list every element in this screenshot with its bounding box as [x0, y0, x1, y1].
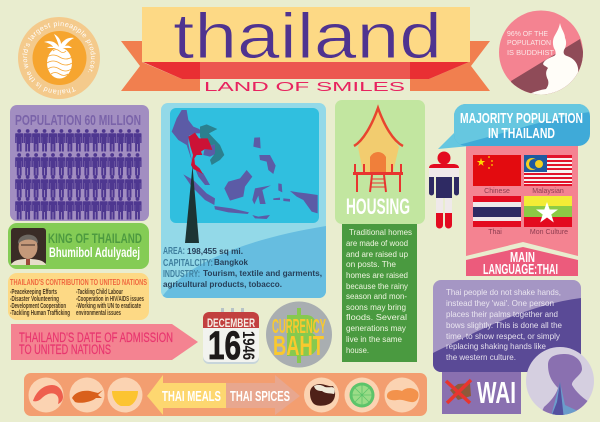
wai description: the western culture. [446, 352, 516, 362]
bubble text: IN THAILAND [488, 125, 555, 142]
housing description: season and mon- [346, 291, 407, 301]
badge: buddhist population [499, 10, 583, 94]
month: DECEMBER [207, 316, 255, 330]
map [170, 108, 319, 243]
badge: currency [266, 302, 332, 368]
subtitle: LAND OF SMILES [204, 80, 405, 94]
panel: population flags [466, 146, 578, 278]
buddhist text: 96% OF THE [507, 31, 548, 38]
housing description: floods. Several [346, 312, 407, 322]
contribution list: -Peacekeeping Efforts [10, 289, 57, 296]
thai spices label: THAI SPICES [230, 389, 290, 405]
flag: China [473, 155, 521, 186]
housing description: are made of wood [346, 238, 408, 248]
main language [466, 247, 578, 278]
contribution list [10, 289, 144, 317]
contribution heading: THAILAND'S CONTRIBUTION TO UNITED NATIONS [10, 277, 147, 287]
panel: population [10, 105, 149, 221]
label: Mon Culture: Mon Culture [530, 229, 568, 236]
speech bubble: majority population [438, 104, 590, 149]
icon: person in Thai flag colours [429, 152, 459, 229]
contribution list: -Tackling Child Labour [76, 289, 123, 296]
currency text: BAHT [273, 330, 324, 361]
housing description: soons may bring [346, 302, 406, 312]
facts: AREA: [163, 245, 185, 257]
facts: Tourism, textile and garments, [203, 269, 322, 278]
title banner [121, 0, 490, 94]
wai description: instead they 'wai'. One person [446, 298, 554, 308]
arrow: thai spices [226, 375, 300, 415]
admission text: TO UNITED NATIONS [19, 342, 111, 357]
people pictogram [15, 129, 142, 220]
icon: shrimp [28, 378, 64, 412]
facts: 198,455 sq mi. [187, 247, 243, 256]
panel: wai [433, 280, 581, 372]
panel: UN contribution [8, 273, 149, 320]
flag: Thai [473, 196, 521, 227]
panel: king [8, 223, 149, 269]
wai description: places their palms together and [446, 309, 558, 319]
wai text: WAI [477, 375, 516, 410]
panel: map and facts [161, 103, 326, 298]
year: 1946 [239, 331, 258, 360]
contribution list: -Disaster Volunteering [10, 296, 59, 303]
housing description: and are raised up [346, 249, 408, 259]
wai label box [442, 362, 521, 414]
icon: thai house [353, 108, 403, 192]
icon: no handshake [446, 380, 471, 403]
housing description: because the rainy [346, 281, 409, 291]
icon: pineapple [44, 34, 74, 78]
arrow: UN admission date [11, 324, 198, 360]
day: 16 [208, 324, 241, 368]
facts: CAPITALCITY: [163, 257, 213, 269]
buddhist text: IS BUDDHIST [507, 50, 555, 57]
housing description: Traditional homes [349, 227, 413, 237]
buddhist text [507, 31, 555, 57]
contribution list: -Cooperation in HIV/AIDS issues [76, 296, 144, 303]
king name: Bhumibol Adulyadej [49, 245, 140, 260]
panel: housing [335, 100, 425, 224]
curved slogan: Thailand is the world's largest pineapple producer. [22, 20, 96, 95]
housing description [342, 224, 417, 362]
admission text [19, 330, 173, 357]
arrow: thai meals [147, 375, 226, 415]
icon: coconut [304, 378, 339, 412]
facts: Bangkok [214, 258, 249, 267]
icon: wai gesture [526, 347, 596, 420]
icon: buddha [526, 23, 578, 96]
housing description: live in the same [346, 334, 402, 344]
contribution list: environmental issues [76, 310, 121, 317]
badge: currency: CURRENCY [272, 316, 326, 338]
label: Thai: Thai [488, 229, 502, 236]
main language: MAIN [510, 250, 535, 266]
facts: agricultural products, tobacco. [163, 280, 282, 289]
thai meals label: THAI MEALS [162, 389, 221, 405]
label: Chinese: Chinese [484, 188, 510, 195]
icon: bowl [108, 378, 142, 412]
badge: pineapple producer [18, 17, 100, 99]
buddhist text: POPULATION [507, 40, 551, 47]
icon: peanut [384, 378, 420, 412]
icon: fish [70, 378, 104, 412]
facts: INDUSTRY: [163, 268, 200, 280]
contribution list: -Working with UN to eradicate [76, 303, 141, 310]
flag: Mon culture [524, 196, 572, 227]
currency text [272, 316, 326, 361]
housing description: on posts. The [346, 259, 396, 269]
icon: calendar [203, 308, 259, 368]
wai description: time, to show respect, or simply [446, 331, 561, 341]
wai description: bows slightly. This is done all the [446, 320, 562, 330]
king portrait [11, 228, 46, 265]
housing description: house. [346, 345, 369, 355]
panel: meals and spices [24, 373, 427, 416]
housing description: homes are raised [346, 270, 408, 280]
housing heading: HOUSING [346, 194, 410, 219]
bubble text [460, 110, 583, 142]
contribution list: -Development Cooperation [10, 303, 66, 310]
wai description [446, 287, 562, 362]
wai description: Thai people do not shake hands, [446, 287, 561, 297]
map pointer [185, 166, 199, 243]
housing description: generations may [346, 323, 407, 333]
admission text: THAILAND'S DATE OF ADMISSION [19, 330, 173, 345]
label: Malaysian: Malaysian [532, 188, 564, 195]
facts [163, 245, 322, 289]
population heading: POPULATION 60 MILLION [15, 112, 141, 129]
icon: lime [344, 378, 380, 412]
flag: Malaysia [524, 155, 572, 186]
icon: baht sign [287, 308, 318, 363]
wai description: replacing shaking hands like [446, 341, 546, 351]
contribution list: -Tackling Human Trafficking [10, 310, 70, 317]
title: thailand [173, 0, 442, 72]
king title: KING OF THAILAND [48, 231, 142, 246]
